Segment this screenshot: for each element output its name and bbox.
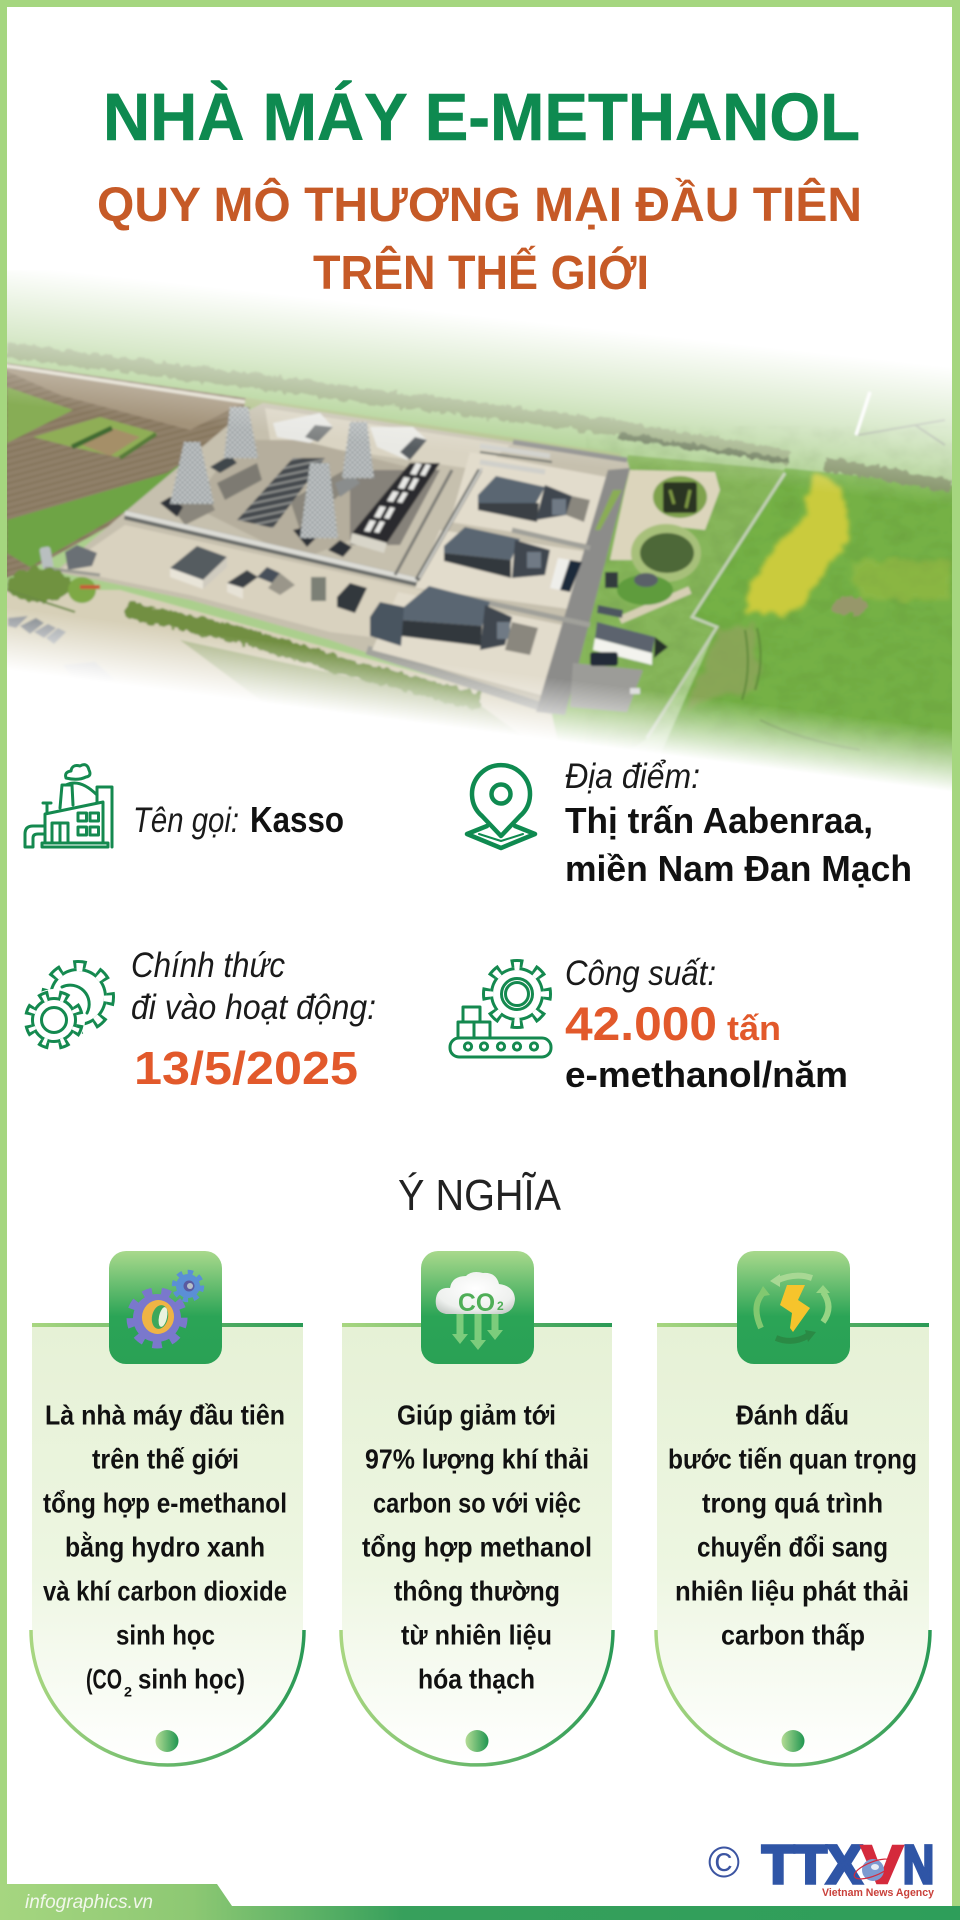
text: Giúp giảm tới — [397, 1400, 556, 1430]
value: capacity: tấn — [727, 1010, 781, 1048]
card background — [342, 1325, 612, 1765]
icon: CO2 cloud on green tile: 2 — [497, 1299, 504, 1313]
logo: TTXVN Vietnam News Agency: V — [861, 1835, 903, 1895]
dot — [156, 1730, 178, 1752]
dot — [782, 1730, 804, 1752]
text: carbon so với việc — [373, 1488, 581, 1518]
text: thông thường — [394, 1576, 560, 1606]
value: date: 13/5/2025 — [134, 1042, 358, 1094]
value: capacity — [565, 997, 848, 1095]
text: sinh học) — [138, 1664, 245, 1694]
text: (CO — [86, 1664, 122, 1694]
logo: TTXVN Vietnam News Agency: © — [708, 1838, 740, 1887]
source: infographics.vn: infographics.vn — [25, 1892, 153, 1913]
icon: map pin — [467, 765, 535, 848]
value: location: Thị trấn Aabenraa, — [565, 800, 873, 841]
plant ground — [55, 403, 630, 715]
value: Kasso: Kasso — [250, 799, 344, 840]
fact: plant name — [25, 765, 344, 847]
card background — [657, 1325, 929, 1765]
label: capacity: Công suất: — [565, 954, 716, 993]
text: trên thế giới — [92, 1444, 239, 1474]
icon: lightning bolt with cycle arrows — [737, 1251, 850, 1364]
text: 97% lượng khí thải — [365, 1444, 589, 1474]
logo: TTXVN Vietnam News Agency: N — [903, 1835, 934, 1895]
text: chuyển đổi sang — [697, 1532, 888, 1562]
text: từ nhiên liệu — [401, 1620, 552, 1650]
pads around the process halls — [450, 452, 612, 545]
value: location: miền Nam Đan Mạch — [565, 848, 912, 889]
text: Là nhà máy đầu tiên — [45, 1400, 285, 1430]
icon: CO2 cloud on green tile — [421, 1251, 534, 1364]
panel: emission reduction — [341, 1251, 613, 1765]
icon: CO2 cloud on green tile: CO — [458, 1289, 495, 1317]
icon: factory — [25, 765, 112, 847]
panel: low-carbon transition — [656, 1251, 930, 1765]
card outline — [656, 1323, 930, 1765]
text: tổng hợp e-methanol — [43, 1488, 287, 1518]
fact: start of operation — [23, 946, 376, 1094]
logo: TTXVN Vietnam News Agency — [708, 1835, 935, 1899]
label: location: Địa điểm: — [565, 757, 700, 796]
icon: gears — [23, 960, 115, 1051]
value: capacity: 42.000 — [565, 997, 717, 1050]
fact: location — [467, 757, 912, 889]
value: capacity: e-methanol/năm — [565, 1054, 848, 1095]
title — [97, 80, 862, 300]
label: start of operation — [131, 946, 376, 1027]
text: sinh học — [116, 1620, 215, 1650]
text: hóa thạch — [418, 1664, 535, 1694]
dot — [466, 1730, 488, 1752]
label: start of operation: đi vào hoạt động: — [131, 988, 376, 1027]
text — [43, 1400, 287, 1700]
text: carbon thấp — [721, 1620, 865, 1650]
card background — [32, 1325, 303, 1765]
photo: aerial view of the Kasso e-methanol plant — [7, 276, 952, 789]
fact: capacity — [450, 954, 848, 1095]
label: start of operation: Chính thức — [131, 946, 285, 985]
text: và khí carbon dioxide — [43, 1576, 287, 1606]
text: nhiên liệu phát thải — [675, 1576, 909, 1606]
text: tổng hợp methanol — [362, 1532, 592, 1562]
text: 2 — [124, 1684, 132, 1700]
card outline — [31, 1323, 304, 1765]
logo: TTXVN Vietnam News Agency: Vietnam News Agency — [822, 1887, 935, 1899]
value: location — [565, 800, 912, 889]
logo: TTXVN Vietnam News Agency: TTX — [762, 1835, 862, 1895]
label: name: Tên gọi: — [133, 801, 239, 840]
text — [668, 1400, 917, 1650]
title: QUY MÔ THƯƠNG MẠI ĐẦU TIÊN — [97, 177, 862, 232]
title: TRÊN THẾ GIỚI — [313, 245, 649, 300]
text: bước tiến quan trọng — [668, 1444, 917, 1474]
icon: gears on green tile — [109, 1251, 222, 1364]
text: bằng hydro xanh — [65, 1532, 265, 1562]
panel: first plant — [31, 1251, 304, 1765]
heading: significance: Ý NGHĨA — [398, 1170, 562, 1220]
footer bar with source tab — [0, 1884, 960, 1920]
text: trong quá trình — [702, 1488, 883, 1518]
text: Đánh dấu — [736, 1400, 849, 1430]
icon: gear on conveyor — [450, 958, 553, 1057]
text — [362, 1400, 592, 1694]
title: NHÀ MÁY E-METHANOL — [103, 80, 860, 155]
card outline — [341, 1323, 613, 1765]
